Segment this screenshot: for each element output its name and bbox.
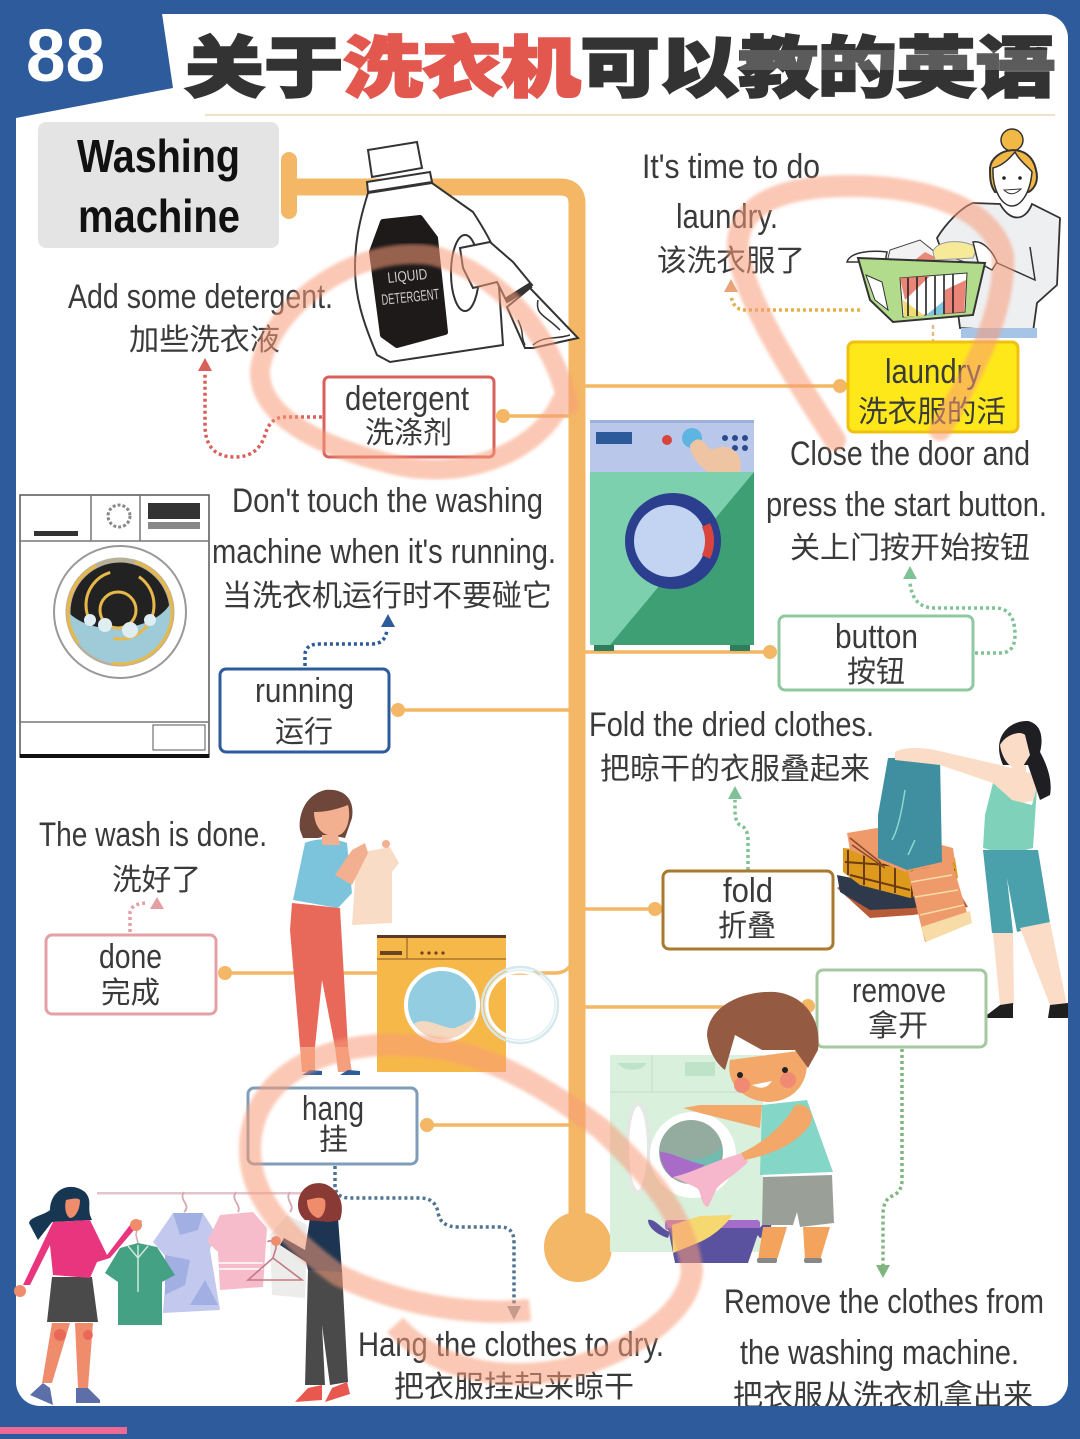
icon: detergent bottle	[355, 142, 578, 362]
text: It's time to do laundry: 该洗衣服了	[657, 245, 805, 278]
text: Hang the clothes to dry: 把衣服挂起来晾干	[394, 1371, 634, 1404]
icon: woman folding clothes	[837, 721, 1068, 1018]
annotation: hand-drawn loop around hang	[250, 1045, 692, 1374]
icon: yellow washing machine	[377, 935, 558, 1072]
label: done: done	[99, 938, 162, 976]
label: hang: hang	[302, 1090, 364, 1128]
label: running: 运行	[275, 716, 333, 749]
text: Hang the clothes to dry	[358, 1326, 664, 1404]
arrow: detergent to sentence	[198, 358, 322, 457]
text: Close the door: 关上门按开始按钮	[790, 532, 1030, 565]
label: detergent: detergent	[345, 380, 469, 418]
label: remove: remove	[852, 972, 946, 1010]
icon: woman with laundry basket	[847, 129, 1060, 338]
text: The wash is done: 洗好了	[112, 864, 201, 897]
text: Add some detergent: Add some detergent.	[68, 278, 333, 316]
label: laundry: laundry	[885, 353, 981, 391]
icon: white washing machine	[20, 495, 209, 758]
text: Remove the clothes: the washing machine.	[740, 1334, 1019, 1372]
heading: Washing machine: machine	[78, 190, 240, 242]
label: laundry: 洗衣服的活	[858, 396, 1006, 429]
text: Fold the dried clothes: 把晾干的衣服叠起来	[600, 753, 870, 786]
text: Add some detergent	[68, 278, 333, 357]
arrow: button to sentence	[903, 566, 1015, 653]
arrow: running to sentence	[305, 614, 395, 666]
text: Don't touch the washing machine: machine when it's running.	[212, 533, 556, 571]
arrow: hang to sentence	[335, 1166, 521, 1320]
text: Close the door	[766, 435, 1047, 565]
text: Don't touch the washing machine: Don't touch the washing	[232, 482, 543, 520]
text: The wash is done: The wash is done.	[39, 816, 267, 854]
annotation: hand-drawn circle around detergent	[260, 254, 568, 469]
branch lines	[218, 379, 847, 1132]
text: Don't touch the washing machine	[212, 482, 556, 613]
text: Remove the clothes: 把衣服从洗衣机拿出来	[733, 1380, 1033, 1413]
text: Fold the dried clothes: Fold the dried clothes.	[589, 706, 874, 744]
text: It's time to do laundry: laundry.	[676, 198, 778, 236]
label: button: button	[835, 618, 918, 656]
number tab	[0, 0, 173, 118]
icon: green washing machine	[590, 420, 754, 651]
text: Hang the clothes to dry: Hang the clothes to dry.	[358, 1326, 664, 1364]
label: fold	[663, 871, 833, 949]
title: 关于 洗衣机 可以教的英语	[185, 31, 1055, 105]
text: Remove the clothes	[724, 1283, 1044, 1413]
arrow: fold to sentence	[728, 786, 748, 870]
arrow: remove to sentence	[876, 1049, 902, 1278]
label: button	[779, 616, 973, 690]
label: detergent	[324, 377, 494, 457]
label: fold: 折叠	[718, 910, 776, 943]
label: laundry	[848, 342, 1018, 432]
label: hang: 挂	[319, 1124, 348, 1157]
arrow: laundry to sentence	[724, 279, 860, 310]
label: hang	[248, 1088, 417, 1164]
icon: detergent bottle: LIQUID	[387, 266, 428, 287]
text: It's time to do laundry: It's time to do	[642, 148, 820, 186]
text: It's time to do laundry	[642, 148, 820, 278]
label: fold: fold	[723, 872, 773, 910]
arrow: done to sentence	[130, 897, 164, 932]
icon: woman holding shirt	[290, 790, 399, 1075]
label: remove	[817, 970, 986, 1047]
annotation: hand-drawn loop around laundry	[738, 186, 1003, 440]
label: done	[46, 935, 216, 1014]
icon: boy unloading washing machine	[610, 992, 834, 1263]
text: Don't touch the washing machine: 当洗衣机运行时不要碰它	[222, 580, 552, 613]
label: done: 完成	[101, 977, 160, 1010]
icon: women hanging clothes	[14, 1183, 350, 1405]
bottom progress bar	[0, 1427, 127, 1434]
text: Fold the dried clothes	[589, 706, 874, 786]
heading: Washing machine: Washing	[77, 130, 240, 182]
label: detergent: 洗涤剂	[365, 417, 452, 450]
number tab: 88	[26, 14, 105, 97]
text: The wash is done	[39, 816, 267, 897]
label: running: running	[255, 672, 354, 710]
label: remove: 拿开	[868, 1010, 928, 1043]
central pipe trunk	[281, 152, 612, 1282]
bottom edge band	[0, 1406, 1080, 1427]
label: running	[220, 669, 389, 752]
heading: Washing machine	[38, 122, 279, 248]
label: button: 按钮	[847, 656, 905, 689]
text: Add some detergent: 加些洗衣液	[129, 324, 280, 357]
text: Close the door: Close the door and	[790, 435, 1030, 473]
icon: detergent bottle: DETERGENT	[381, 286, 440, 309]
decorative connector: basket to label	[932, 325, 934, 342]
